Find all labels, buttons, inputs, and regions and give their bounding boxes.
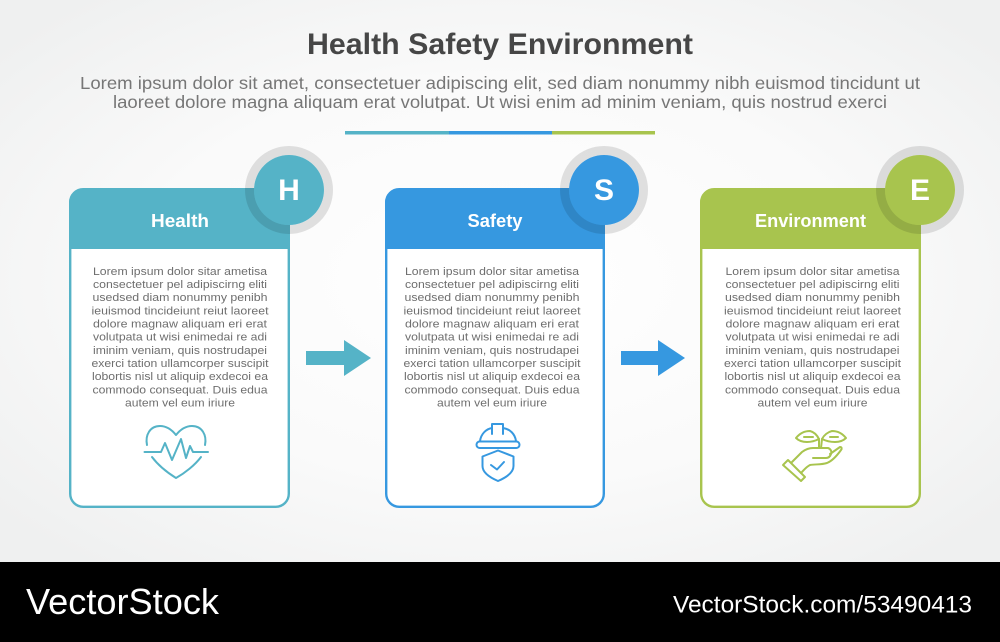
environment body text: consectetuer pel adipiscirng eliti	[726, 279, 900, 291]
environment body text: usedsed diam nonummy penibh	[725, 292, 900, 304]
safety badge: S	[594, 174, 614, 207]
health body text: lobortis nisl ut aliquip exdecoi ea	[92, 371, 269, 383]
health body text: autem vel eum iriure	[125, 398, 235, 410]
panel: health	[69, 150, 328, 507]
safety body text: iminim veniam, quis nostrudapei	[405, 345, 579, 357]
environment body text: autem vel eum iriure	[758, 398, 868, 410]
environment body text: iminim veniam, quis nostrudapei	[726, 345, 900, 357]
environment body text: Lorem ipsum dolor sitar ametisa	[726, 266, 900, 278]
safety body text: autem vel eum iriure	[437, 398, 547, 410]
arrow: safety to environment	[621, 340, 685, 376]
safety heading: Safety	[468, 210, 523, 231]
health body text: ieuismod tincideiunt reiut laoreet	[92, 306, 269, 318]
health card header	[69, 189, 290, 249]
health body text: consectetuer pel adipiscirng eliti	[93, 279, 267, 291]
footer bar	[0, 562, 1000, 642]
health body text	[92, 266, 269, 410]
health badge	[250, 150, 328, 230]
health body text: iminim veniam, quis nostrudapei	[93, 345, 267, 357]
environment card header	[700, 189, 921, 249]
safety card header	[385, 189, 605, 249]
footer url: VectorStock.com/53490413	[673, 592, 972, 618]
health body text: dolore magnaw aliquam eri erat	[93, 318, 268, 330]
environment body text: exerci tation ullamcorper suscipit	[724, 358, 902, 370]
safety body text: dolore magnaw aliquam eri erat	[405, 318, 580, 330]
environment badge: E	[910, 174, 930, 207]
health body text: volutpata ut wisi enimedai re adi	[93, 332, 267, 344]
subtitle text block: Lorem ipsum dolor sit amet, consectetuer adipiscing elit, sed diam nonummy nibh euismod tincidunt ut	[80, 73, 920, 93]
environment heading: Environment	[755, 210, 866, 231]
icon: heart with pulse	[144, 426, 208, 478]
footer logo: VectorStock	[26, 581, 220, 622]
panel: safety	[385, 150, 644, 507]
health body text: exerci tation ullamcorper suscipit	[92, 358, 269, 370]
health body text: usedsed diam nonummy penibh	[92, 292, 268, 304]
safety body text: lobortis nisl ut aliquip exdecoi ea	[404, 371, 581, 383]
safety body text: usedsed diam nonummy penibh	[404, 292, 580, 304]
icon: hand holding sprout	[783, 431, 846, 481]
subtitle text block: laoreet dolore magna aliquam erat volutpat. Ut wisi enim ad minim veniam, quis nostrud exerci	[113, 92, 887, 112]
safety body text	[404, 266, 581, 410]
environment body text: volutpata ut wisi enimedai re adi	[726, 332, 900, 344]
arrow: health to safety	[306, 340, 371, 376]
health body text: commodo consequat. Duis edua	[92, 384, 268, 396]
safety body text: exerci tation ullamcorper suscipit	[404, 358, 581, 370]
title: Health Safety Environment	[307, 28, 693, 61]
safety badge	[564, 150, 644, 230]
environment badge	[880, 150, 960, 230]
health badge: H	[278, 174, 300, 207]
health body text: Lorem ipsum dolor sitar ametisa	[93, 266, 268, 278]
safety body text: commodo consequat. Duis edua	[404, 384, 580, 396]
environment body text: dolore magnaw aliquam eri erat	[726, 318, 900, 330]
icon: hard hat with shield	[476, 424, 520, 481]
tricolor divider	[345, 131, 655, 134]
environment body text: commodo consequat. Duis edua	[725, 384, 901, 396]
safety body text: Lorem ipsum dolor sitar ametisa	[405, 266, 580, 278]
health card frame	[70, 189, 289, 507]
safety body text: volutpata ut wisi enimedai re adi	[405, 332, 579, 344]
panel: environment	[700, 150, 960, 507]
health heading: Health	[151, 210, 209, 231]
environment body text	[724, 266, 902, 410]
safety card frame	[386, 189, 604, 507]
environment body text: ieuismod tincideiunt reiut laoreet	[724, 306, 902, 318]
environment body text: lobortis nisl ut aliquip exdecoi ea	[724, 371, 901, 383]
safety body text: ieuismod tincideiunt reiut laoreet	[404, 306, 581, 318]
environment card frame	[701, 189, 920, 507]
safety body text: consectetuer pel adipiscirng eliti	[405, 279, 579, 291]
subtitle text block	[80, 73, 920, 112]
